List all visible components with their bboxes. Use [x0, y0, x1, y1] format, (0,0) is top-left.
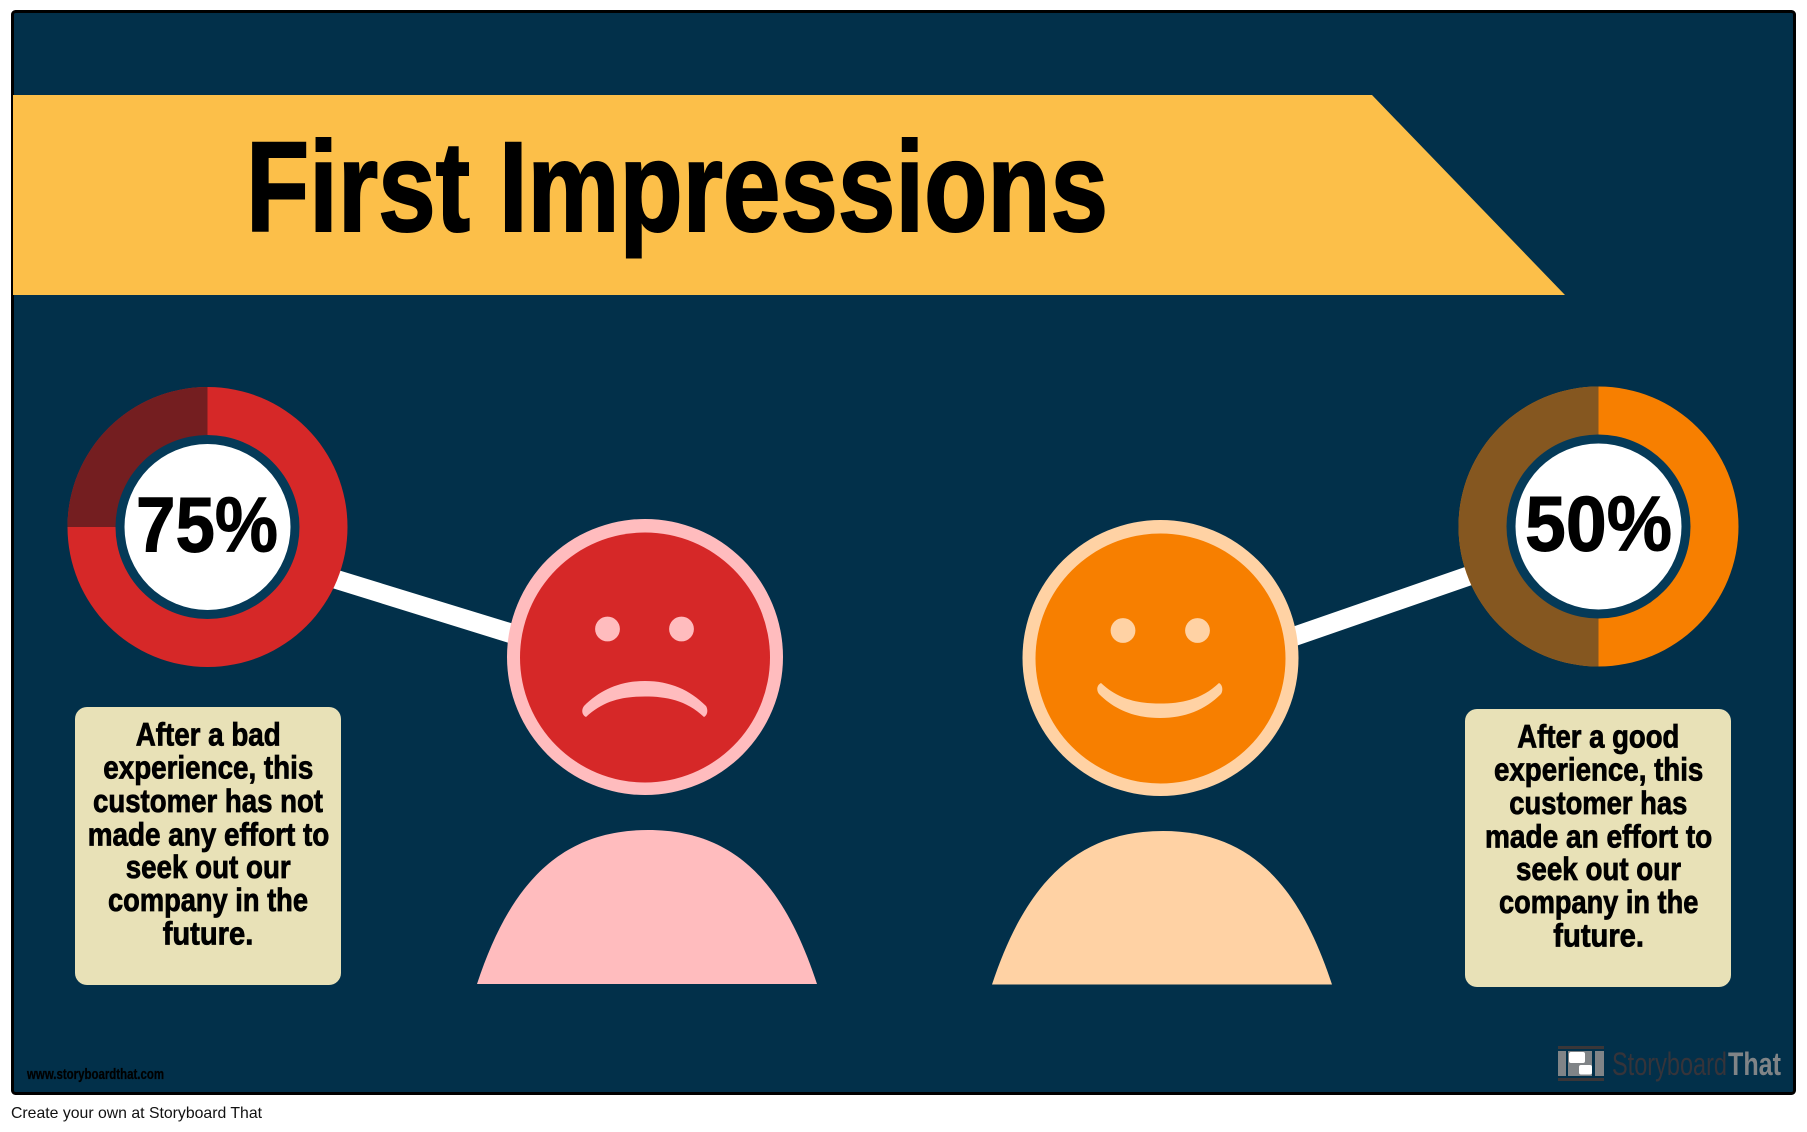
card copy: After a bad [136, 716, 281, 752]
title: First Impressions [246, 116, 1108, 259]
percentage: 75%: 75% [136, 480, 278, 568]
figure: sad customer [477, 519, 817, 984]
text block: good experience [1465, 709, 1731, 987]
card copy: experience, this [103, 750, 313, 786]
donut remaining quarter [68, 387, 208, 527]
website url: www.storyboardthat.com [26, 1067, 164, 1083]
donut inner ring [1506, 434, 1690, 618]
card copy [1485, 718, 1712, 954]
card copy: experience, this [1494, 752, 1703, 788]
text block: bad experience [75, 707, 341, 985]
card copy: company in the [1499, 884, 1698, 920]
figure: happy customer [992, 520, 1332, 984]
card copy: future. [163, 916, 253, 952]
film strip icon [1558, 1046, 1604, 1081]
card copy: made any effort to [88, 816, 329, 852]
title banner [13, 95, 1565, 295]
beige card [1465, 709, 1731, 987]
footer caption: Create your own at Storyboard That [11, 1105, 263, 1122]
left eye [595, 617, 620, 641]
donut centre [1516, 444, 1682, 610]
watermark logo [1558, 1046, 1781, 1082]
donut centre [124, 444, 290, 610]
donut chart: 50% [1458, 386, 1738, 666]
left eye [1111, 618, 1135, 643]
percentage: 50%: 50% [1525, 480, 1672, 568]
donut track [68, 387, 348, 667]
card copy: seek out our [126, 849, 291, 885]
frown [582, 681, 707, 717]
donut remaining half [1458, 386, 1598, 666]
face [1036, 534, 1286, 784]
right eye [669, 617, 694, 641]
donut chart: 75% [68, 387, 348, 667]
card copy: seek out our [1516, 851, 1681, 887]
card copy: customer has [1509, 785, 1687, 821]
body [992, 831, 1332, 984]
card copy [88, 716, 329, 952]
face [520, 532, 770, 782]
beige card [75, 707, 341, 985]
wordmark bold: That [1728, 1046, 1781, 1082]
face outline [1022, 520, 1298, 796]
connector line: left donut to sad face [332, 570, 514, 643]
body [477, 830, 817, 984]
card copy: company in the [108, 882, 308, 918]
face outline [507, 519, 783, 795]
banner shape [13, 95, 1565, 295]
card copy: made an effort to [1485, 818, 1712, 854]
donut inner ring [116, 435, 300, 619]
card copy: After a good [1517, 718, 1679, 754]
smile [1097, 683, 1222, 718]
card copy: customer has not [93, 783, 323, 819]
donut track [1458, 386, 1738, 666]
right eye [1185, 618, 1210, 643]
connector line: right donut to happy face [1292, 567, 1472, 646]
wordmark: Storyboard [1612, 1046, 1727, 1082]
card copy: future. [1553, 918, 1644, 954]
